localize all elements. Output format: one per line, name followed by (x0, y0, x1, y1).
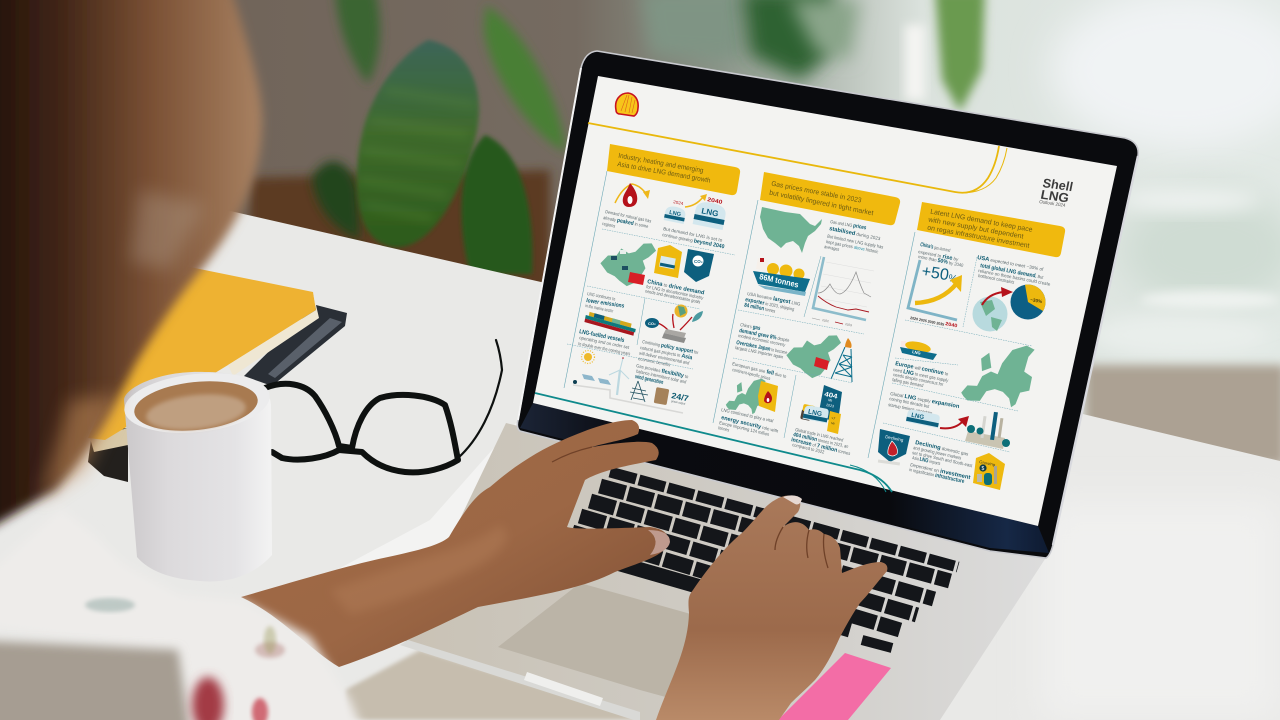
chart: +50% rise to 2040: +50 (920, 262, 950, 284)
text: prices stabilised: Gas and LNG prices (830, 219, 867, 231)
icon: global LNG trade 404 Mt: Mt (831, 421, 835, 426)
panel: Industry, heating and emerging Asia (564, 144, 740, 413)
map: USA (760, 207, 822, 253)
text: supply expansion: Global LNG supply expansion (890, 391, 960, 410)
icon: policy support building with arrows: CO₂ (648, 321, 656, 326)
icon: LNG tank with arrow to regas plant (906, 409, 969, 428)
blurred plant leaves (250, 0, 985, 295)
text: flexibility: wind generation (634, 374, 664, 386)
text: prices stabilised: kept gas prices above historic (826, 239, 879, 255)
icon: growing yellow house: $ (982, 466, 984, 472)
text: USA expected to meet: USA expected to meet ~30% of (977, 255, 1045, 273)
chart: +50% rise to 2040 (908, 260, 962, 329)
map: China with factories (598, 238, 657, 289)
pie chart: about 30 percent (1010, 284, 1046, 320)
text: largest exporter: USA became largest LNG (747, 291, 801, 308)
text: China's gas demand: China's gas demand (920, 242, 951, 254)
text: Europe will continue: needs despite consensus for (893, 372, 944, 387)
text: declining domestic gas: and growing power markets (913, 445, 962, 461)
pie chart: about 30 percent: ~30% (1030, 297, 1043, 304)
icon: container ship (584, 311, 637, 336)
text: China gas demand grew 8%: largest LNG importer again (735, 345, 784, 360)
arm highlights (330, 525, 507, 615)
text: peaked: Demand for natural gas has (605, 209, 652, 224)
text: China gas demand grew 8%: demand grew 8% despite (739, 328, 790, 344)
text: flexibility: Gas provides flexibility to (636, 363, 689, 380)
text: declining domestic gas (912, 440, 973, 468)
heading text: Latent LNG demand to keep pace (930, 209, 1033, 234)
text: lower emissions (585, 291, 625, 314)
text: USA expected to meet: total global LNG demand. But (980, 263, 1044, 281)
map: China with flag (784, 330, 842, 381)
icon: LNG tanks 2024 to 2040: 2024 (673, 199, 685, 206)
heading box (607, 144, 740, 195)
text: peaked (602, 209, 652, 230)
title: Shell LNG Outlook 2024: LNG (1039, 188, 1070, 205)
heading text: with new supply but dependent (927, 216, 1024, 241)
text: global trade 404 million (791, 427, 851, 457)
chart: +50% rise to 2040: 2020 2025 2030 2035 (910, 316, 945, 327)
icon: yellow tag with flame (758, 381, 778, 412)
text: China's gas demand: more than 50% by 2040 (918, 254, 964, 269)
text: prices stabilised: averages (824, 244, 840, 252)
text: energy security role: tonnes (718, 425, 730, 433)
text: energy security role: energy security role with (721, 415, 779, 435)
grey energy network line (573, 385, 683, 413)
notebooks stack (88, 262, 347, 482)
text: dependent on investment: in regasification infrastructure (909, 467, 965, 485)
text: largest exporter: exporter in 2023, shipping (745, 297, 795, 313)
thumbnail (648, 530, 670, 555)
icon: battery and 24/7: power output (671, 399, 686, 406)
icon: battery and 24/7 (654, 387, 690, 406)
finger separation (552, 447, 592, 462)
text: USA expected to meet (977, 255, 1051, 287)
icon: global LNG trade 404 Mt: Mt (828, 398, 832, 403)
icon: small LNG ship: LNG (912, 349, 921, 356)
icon: regas plant (965, 412, 1010, 449)
title: Shell LNG Outlook 2024 (1039, 176, 1074, 208)
text: global trade 404 million: 404 million tonnes in 2023, an (793, 432, 849, 450)
icon: LNG ship 86M tonnes (753, 258, 810, 296)
heading text: but volatility lingered in tight market (769, 190, 874, 217)
text: energy security role: LNG continued to play a vital (721, 407, 774, 423)
text: lower emissions: in the marine sector (585, 303, 614, 314)
text: supply expansion: coming this decade but (889, 396, 930, 409)
panel: latent LNG demand (868, 202, 1065, 490)
text: global trade 404 million: compared to 2022 (792, 442, 825, 455)
text: European gas use fell: European gas use fell due to (732, 361, 787, 380)
text: China's gas demand (918, 242, 964, 269)
icon: policy support building with arrows (645, 304, 703, 343)
icon: flame with arrow (615, 183, 650, 207)
text: global trade 404 million: Global trade in LNG reached (795, 427, 844, 443)
icon: teal shield with CO2 cloud: CO₂ (694, 259, 703, 264)
text: declining domestic gas: Asia LNG imports (912, 455, 941, 467)
chart: +50% rise to 2040: 2040 (945, 321, 958, 329)
icon: global LNG trade 404 Mt: 2023 (826, 403, 834, 409)
text: declining domestic gas: Declining domestic gas (915, 440, 969, 458)
text: Europe will continue: need LNG to meet gas supply (893, 367, 949, 384)
icon: global LNG trade 404 Mt (800, 385, 842, 434)
text: dependent on investment: Dependent on investment (910, 462, 971, 481)
text: Europe will continue (892, 361, 949, 388)
icon: yellow house with LNG tank (654, 245, 682, 278)
icon: globe with red arrow (972, 287, 1013, 332)
text: largest exporter: 84 million tonnes (744, 303, 776, 315)
map: Europe small (725, 376, 766, 415)
eyeglasses (265, 340, 502, 472)
icon: global LNG trade 404 Mt: 404 (824, 391, 838, 401)
text: USA expected to meet: reliance on these basins could create (978, 268, 1051, 287)
text: USA expected to meet: bottleneck constraints (978, 273, 1015, 285)
line chart: gas prices 2022 vs 2023: 2023 (845, 322, 853, 327)
text: supply expansion: startup timings uncertain (888, 402, 933, 416)
heading box (760, 172, 900, 225)
title: Shell LNG Outlook 2024: Shell (1041, 176, 1074, 194)
icon: battery and 24/7: 24/7 (671, 391, 690, 403)
icon: LNG tanks 2024 to 2040: LNG (701, 206, 719, 219)
icon: LNG tanks 2024 to 2040: LNG (669, 210, 681, 218)
line chart: gas prices 2022 vs 2023: 2022 (822, 318, 830, 323)
coffee mug (121, 367, 273, 581)
text: China gas demand grew 8%: China's gas (740, 322, 761, 332)
icon: teal shield with CO2 cloud (684, 249, 714, 282)
heading text (927, 209, 1033, 250)
icon: small LNG ship (900, 339, 937, 360)
icon: declining shield with flame: Declining (885, 434, 904, 443)
text: LNG-fuelled vessels (578, 329, 631, 356)
text: continuing policy support (638, 339, 699, 368)
icon: LNG tanks 2024 to 2040: 2040 (707, 197, 723, 206)
line chart: gas prices 2022 vs 2023 (812, 257, 874, 327)
knuckle shading (775, 527, 828, 568)
text: global trade 404 million: increase of 7 million tonnes (791, 437, 851, 457)
text: China to drive demand: China to drive demand (647, 279, 705, 296)
text: beyond 2040: But demand for LNG is set to (663, 226, 723, 243)
icon: gas derrick with flame (831, 338, 852, 382)
icon: solar panels (573, 374, 611, 385)
text: LNG-fuelled vessels: to double over the coming years (578, 341, 631, 356)
trackpad (498, 583, 705, 705)
gold header rule (588, 123, 1007, 193)
icon: global LNG trade 404 Mt: LNG (807, 408, 822, 418)
infographic screen (533, 76, 1117, 526)
icon: LNG tanks 2024 to 2040 (664, 194, 727, 230)
text: beyond 2040: continue growing beyond 2040 (662, 232, 725, 250)
text: peaked: already peaked in some (603, 215, 649, 230)
text: Europe will continue: falling gas demand (892, 377, 924, 388)
text: continuing policy support: will deliver environmental and (639, 351, 690, 366)
text: LNG-fuelled vessels: operating and on order set (579, 335, 630, 350)
text: lower emissions: lower emissions (586, 298, 625, 310)
icon: transmission pylon (630, 381, 648, 402)
text: China to drive demand: needs and decarbonisation goals (645, 289, 701, 305)
text: continuing policy support: economic benefits (638, 356, 671, 368)
front lip notch (524, 672, 603, 706)
blurred background wall and window (0, 0, 1280, 465)
panel: gas prices more stable in 2023 (713, 172, 900, 457)
blurred hair (0, 0, 262, 540)
text: peaked: regions (602, 221, 616, 229)
white paper sheet (314, 423, 530, 600)
heading box (917, 202, 1065, 257)
text: energy security role (718, 407, 779, 437)
text: prices stabilised (824, 219, 884, 255)
text: China's gas demand: expected to rise by (918, 249, 959, 263)
icon: growing yellow house (973, 453, 1005, 490)
text: China gas demand grew 8%: modest economic recovery (738, 333, 786, 348)
text: continuing policy support: natural gas projects in Asia (640, 345, 694, 362)
white desk (0, 205, 1280, 720)
icon: LNG tank with arrow to regas plant: LNG (911, 412, 925, 421)
text: European gas use fell: continent-specific prices (732, 367, 771, 381)
bottom teal rule (535, 393, 892, 492)
heading text: Asia to drive LNG demand growth (617, 161, 711, 185)
icon: declining shield with flame (878, 429, 910, 466)
icon: wind turbine (609, 357, 629, 395)
text: LNG-fuelled vessels: LNG-fuelled vessels (579, 329, 625, 344)
text: continuing policy support: Continuing policy support for (642, 339, 699, 356)
laptop lid and bezel (517, 51, 1138, 558)
icon: LNG ship 86M tonnes: 86M tonnes (759, 272, 800, 290)
text: flexibility: balance intermittent solar and (636, 369, 687, 385)
heading text: Industry, heating and emerging (618, 153, 704, 175)
icon: global LNG trade 404 Mt: +7 (831, 416, 836, 421)
text: largest exporter (744, 291, 801, 315)
sticky pink note (778, 653, 891, 720)
text: China to drive demand (645, 279, 705, 305)
chart: +50% rise to 2040: % (948, 273, 958, 285)
keyboard (565, 472, 958, 648)
laptop base (400, 423, 1047, 720)
text: China to drive demand: for LNG to decarbonise industry (646, 284, 704, 301)
heading text: on regas infrastructure investment (927, 225, 1030, 250)
map: Europe large (960, 343, 1035, 408)
text: lower emissions: LNG continues to (587, 291, 616, 302)
text: prices stabilised: But limited new LNG supply has (827, 234, 884, 250)
text: China gas demand grew 8%: Overtakes Japan to become (736, 340, 788, 356)
text: Europe will continue: Europe will continue to (895, 361, 949, 378)
text: energy security role: Europe importing 124 million (719, 420, 770, 437)
left arm and hand (241, 420, 670, 667)
icon: Shell pecten logo (616, 93, 638, 116)
text: declining domestic gas: set to drive South and South-east (912, 450, 973, 468)
right hand (656, 495, 887, 720)
heading text: Gas prices more stable in 2023 (771, 181, 862, 205)
text: prices stabilised: stabilised during 2023 (829, 226, 881, 242)
icon: growing yellow house: Growing (979, 459, 996, 467)
icon: sun (582, 350, 594, 364)
text: China gas demand grew 8% (735, 322, 790, 360)
title: Shell LNG Outlook 2024: Outlook 2024 (1039, 199, 1066, 208)
blurred shirt (0, 508, 365, 720)
